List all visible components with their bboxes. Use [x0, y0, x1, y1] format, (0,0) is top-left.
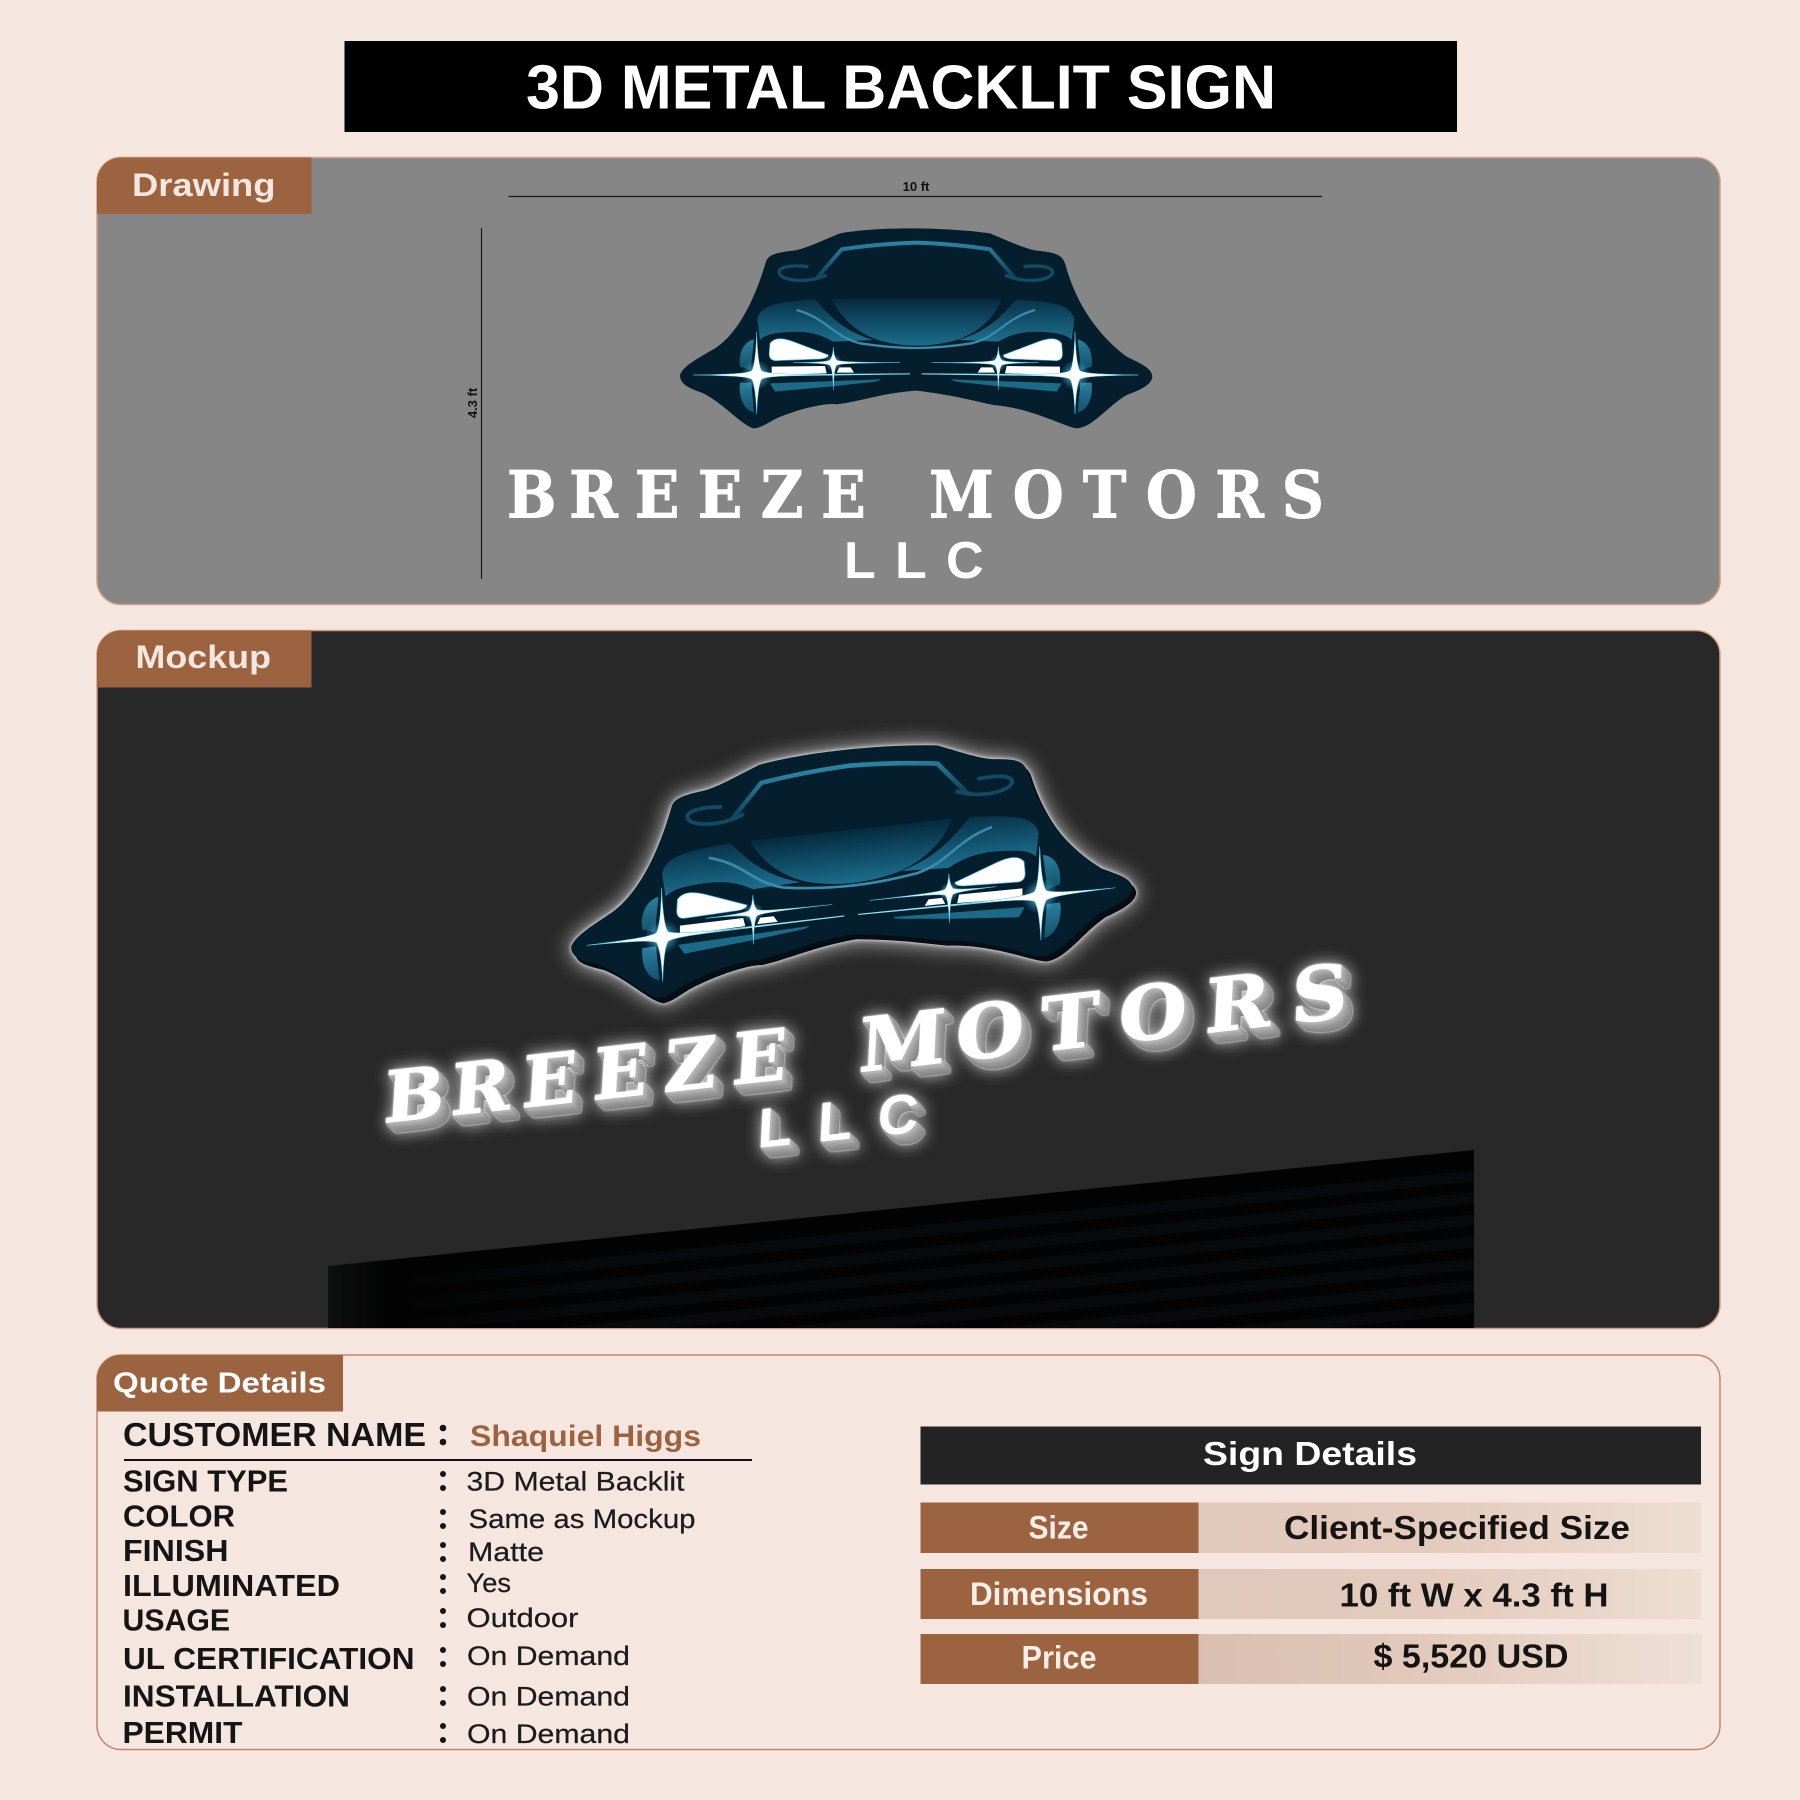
- spec row: UL certification: On Demand: [467, 1641, 630, 1671]
- spec row: usage: [122, 1602, 579, 1638]
- sign text: BREEZE MOTORS: MOTORS: [929, 457, 1324, 533]
- sign text: BREEZE MOTORS: [507, 457, 1324, 533]
- spec row: usage: USAGE: [122, 1602, 230, 1638]
- illuminated text: BREEZE MOTORS: BREEZE: [382, 1012, 789, 1140]
- spec row: sign type: [123, 1464, 685, 1498]
- spec row: finish: [123, 1533, 544, 1568]
- illuminated logo: car: [569, 719, 1133, 1008]
- tab: mockup label: Mockup: [136, 639, 271, 675]
- tab: quote details label: Quote Details: [113, 1368, 326, 1400]
- spec row: installation: On Demand: [467, 1682, 630, 1712]
- tab: drawing label: [97, 158, 312, 214]
- row: size: Client-Specified Size: [1284, 1509, 1630, 1546]
- panel: quote details: [97, 1355, 1720, 1750]
- illuminated text: BREEZE MOTORS: [382, 948, 1350, 1140]
- row: dimensions: Dimensions: [970, 1576, 1148, 1612]
- illuminated text: LLC: LLC: [756, 1081, 920, 1160]
- panel: mockup: [96, 630, 1721, 1330]
- spec row: installation: [123, 1678, 630, 1714]
- customer name row: Shaquiel Higgs: [470, 1420, 701, 1453]
- height dimension line: 4.3 ft: [465, 387, 480, 418]
- spec row: finish: FINISH: [123, 1533, 228, 1568]
- spec row: installation: INSTALLATION: [123, 1678, 350, 1714]
- spec row: illuminated: Yes: [466, 1568, 511, 1598]
- row: price: $ 5,520 USD: [1374, 1638, 1568, 1674]
- spec row: permit: On Demand: [467, 1719, 630, 1749]
- building door: [328, 1150, 1474, 1328]
- spec row: UL certification: [123, 1641, 630, 1676]
- customer name row: [123, 1416, 752, 1460]
- spec row: finish: Matte: [468, 1537, 544, 1567]
- row: size: Size: [1028, 1510, 1088, 1546]
- width dimension line: 10 ft: [903, 179, 930, 194]
- spec row: sign type: SIGN TYPE: [123, 1464, 288, 1498]
- row: price: [920, 1634, 1702, 1684]
- tab: quote details label: [97, 1355, 343, 1412]
- tab: mockup label: [97, 630, 312, 688]
- row: price: Price: [1022, 1640, 1096, 1676]
- spec row: color: COLOR: [123, 1498, 235, 1534]
- spec row: illuminated: ILLUMINATED: [123, 1568, 340, 1603]
- spec row: illuminated: [123, 1568, 511, 1603]
- spec row: color: [123, 1498, 696, 1534]
- customer name row: CUSTOMER NAME: [123, 1416, 426, 1453]
- spec row: color: Same as Mockup: [468, 1504, 696, 1534]
- sign details header: [920, 1426, 1701, 1484]
- sign text: BREEZE MOTORS: BREEZE: [507, 457, 866, 533]
- row: dimensions: 10 ft W x 4.3 ft H: [1340, 1576, 1608, 1614]
- sign details header: Sign Details: [1203, 1435, 1417, 1472]
- spec row: permit: [122, 1715, 630, 1750]
- sign details table: [920, 1426, 1702, 1684]
- logo: car: [680, 228, 1152, 428]
- spec row: permit: PERMIT: [122, 1715, 243, 1750]
- illuminated text: BREEZE MOTORS: MOTORS: [857, 948, 1350, 1091]
- spec row: usage: Outdoor: [466, 1603, 579, 1633]
- title banner: 3D METAL BACKLIT SIGN: [526, 54, 1276, 122]
- panel: drawing: [97, 158, 1720, 604]
- tab: drawing label: Drawing: [132, 167, 276, 203]
- row: dimensions: [920, 1569, 1701, 1619]
- sign text: LLC: LLC: [844, 532, 984, 590]
- spec row: UL certification: UL CERTIFICATION: [123, 1641, 414, 1676]
- title banner: [344, 41, 1457, 132]
- row: size: [920, 1502, 1701, 1553]
- spec row: sign type: 3D Metal Backlit: [466, 1466, 685, 1496]
